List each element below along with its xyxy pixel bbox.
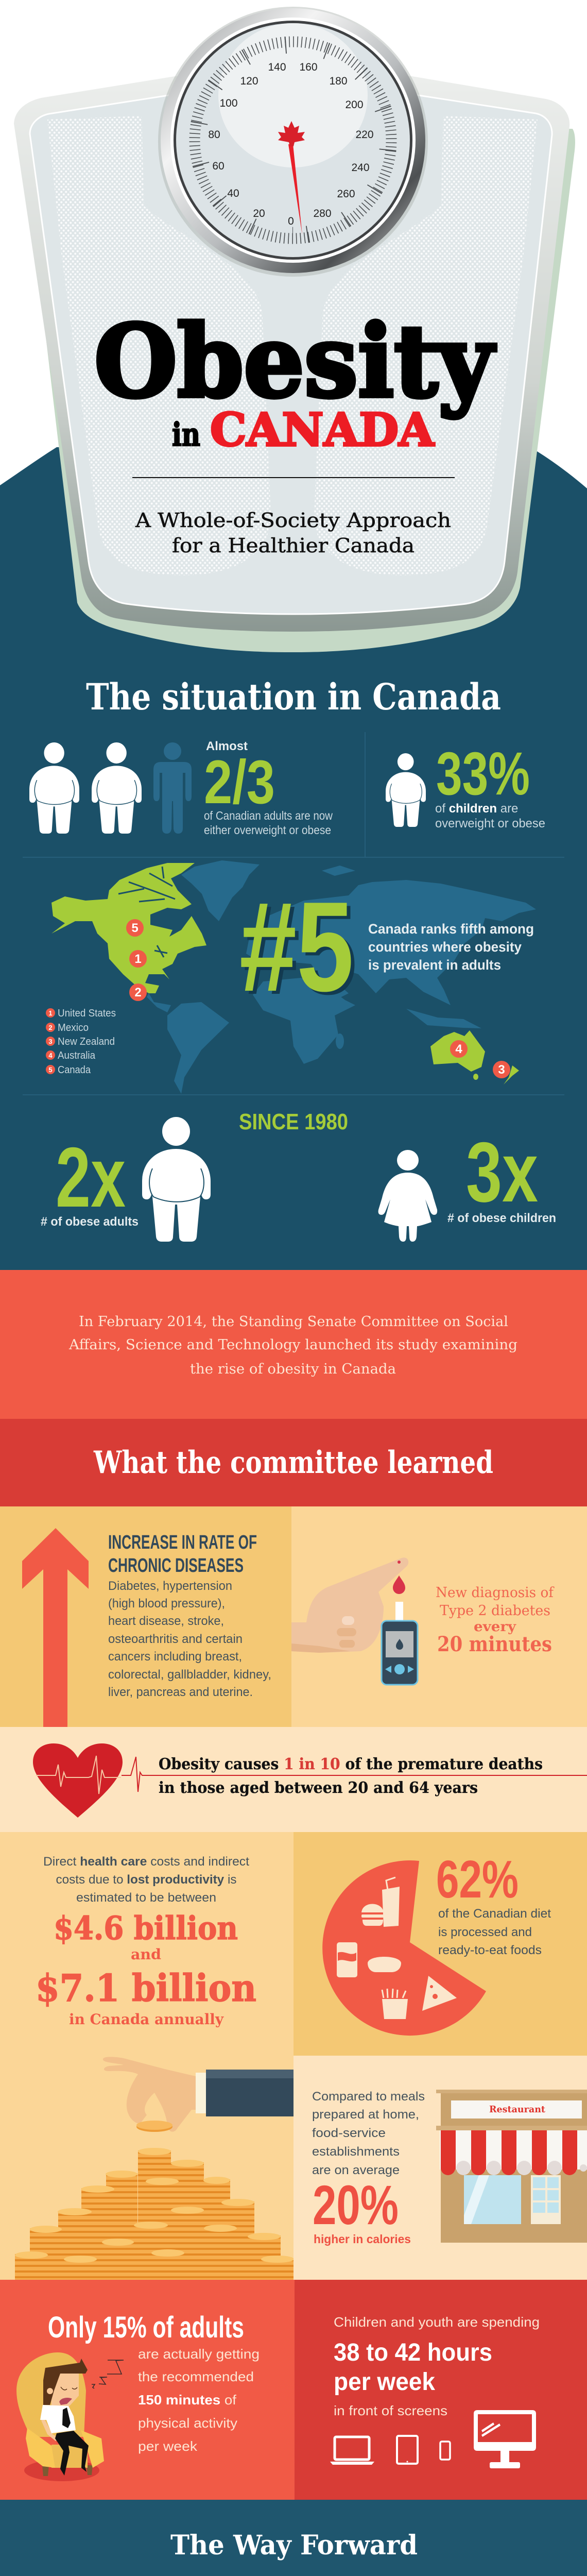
stat: 2x obese adults: 2x	[56, 1130, 126, 1225]
panel: committee intro: Affairs, Science and Technology launched its study examining	[68, 1337, 517, 1353]
stat: 3x obese children: 3x	[466, 1125, 538, 1219]
map legend: Australia	[58, 1050, 96, 1061]
panel: economic cost: $7.1 billion	[36, 1966, 256, 2010]
chart: 62 percent pie	[322, 1860, 486, 2036]
map legend: 1	[48, 1009, 53, 1017]
map legend	[46, 1008, 116, 1076]
illustration: hand dropping coin	[103, 2057, 294, 2132]
stat: 33% of children: 33%	[436, 740, 530, 808]
text: Canada ranks fifth	[368, 921, 534, 973]
dial: 160	[299, 61, 318, 73]
map legend: 2	[48, 1024, 53, 1031]
stat: 2/3 of adults	[204, 739, 333, 837]
dial: 60	[212, 160, 225, 172]
stat: 2/3 of adults: 2/3	[204, 748, 275, 817]
stat: 33% of children: of children are	[435, 802, 518, 816]
map markers: 3	[498, 1063, 505, 1077]
panel: restaurant calories: food-service	[312, 2126, 386, 2140]
panel: screen time: in front of screens	[334, 2403, 447, 2418]
map markers: 1	[134, 952, 142, 966]
dial: 0	[288, 215, 294, 227]
subtitle: A Whole-of-Society Approach	[135, 509, 451, 532]
panel: economic cost: and	[131, 1946, 161, 1963]
text: Canada ranks fifth: Canada ranks fifth among	[368, 921, 534, 937]
text: Canada ranks fifth: countries where obesity	[368, 939, 522, 955]
stat: 3x obese children: # of obese children	[447, 1211, 556, 1225]
panel: chronic diseases: osteoarthritis and certain	[108, 1632, 243, 1646]
panel: type 2 diabetes: every	[474, 1619, 516, 1635]
panel: physical activity: Only 15% of adults	[48, 2311, 244, 2344]
map legend: Canada	[58, 1064, 91, 1076]
dial	[158, 7, 428, 277]
panel: restaurant calories: higher in calories	[314, 2232, 411, 2246]
panel: physical activity: 150 minutes of	[138, 2392, 237, 2408]
panel: economic cost	[0, 1832, 294, 2280]
dial: 220	[355, 129, 374, 141]
panel: physical activity: the recommended	[138, 2369, 254, 2384]
illustration: coin stacks	[15, 2148, 294, 2280]
dial: 140	[268, 61, 286, 73]
panel: chronic diseases: (high blood pressure),	[108, 1597, 225, 1611]
panel: chronic diseases: liver, pancreas and uterine.	[108, 1685, 253, 1699]
title: Obesity	[94, 303, 496, 420]
map legend: 4	[48, 1052, 53, 1059]
background: situation panel	[0, 447, 587, 1270]
illustration: man asleep in armchair	[16, 2352, 124, 2481]
background: header white	[0, 0, 587, 644]
panel: premature deaths: Obesity causes 1 in 10 of the premature deaths	[159, 1755, 543, 1773]
dial: 260	[337, 188, 355, 200]
panel: economic cost: costs due to lost productivity is	[56, 1873, 236, 1887]
dial: 80	[208, 129, 220, 141]
panel: economic cost: in Canada annually	[69, 2011, 224, 2028]
panel: chronic diseases: heart disease, stroke,	[108, 1614, 224, 1628]
panel: restaurant calories: 20%	[313, 2174, 399, 2236]
panel: restaurant calories: establishments	[312, 2145, 400, 2159]
panel: screen time: Children and youth are spending	[334, 2314, 540, 2330]
panel: type 2 diabetes	[291, 1506, 587, 1727]
icon: girl	[378, 1150, 437, 1242]
stat: 33% of children	[435, 740, 545, 831]
panel: premature deaths	[0, 1727, 587, 1832]
heading: the situation in Canada: The situation in Canada	[86, 675, 501, 718]
panel: committee intro: In February 2014, the Standing Senate Committee on Social	[79, 1314, 508, 1330]
dial: 120	[240, 75, 258, 87]
icon: phone	[440, 2442, 450, 2460]
panel: economic cost: Direct health care costs and indirect	[43, 1855, 249, 1869]
panel: chronic diseases: colorectal, gallbladder, kidney,	[108, 1668, 271, 1682]
map markers	[126, 919, 510, 1078]
title: in	[172, 416, 200, 453]
panel: type 2 diabetes: New diagnosis of	[436, 1585, 555, 1601]
panel: economic cost: estimated to be between	[76, 1891, 216, 1905]
panel: chronic diseases	[0, 1506, 291, 1727]
heading: the way forward	[0, 2500, 587, 2576]
panel: chronic diseases: cancers including breast,	[108, 1650, 242, 1664]
panel: processed foods	[294, 1832, 587, 2056]
map legend: United States	[58, 1008, 116, 1019]
map markers: 2	[134, 986, 142, 999]
stat: 2x obese adults: # of obese adults	[41, 1215, 139, 1229]
dial: 100	[219, 97, 238, 109]
panel: physical activity	[0, 2280, 295, 2500]
stat: 2/3 of adults: Almost	[206, 739, 248, 753]
world map	[51, 860, 536, 1094]
map markers: 5	[131, 921, 139, 935]
text: Canada ranks fifth: is prevalent in adults	[368, 957, 501, 973]
map markers: 4	[455, 1042, 462, 1056]
stat: 2/3 of adults: of Canadian adults are now	[204, 809, 333, 822]
panel: restaurant calories: Compared to meals	[312, 2090, 425, 2104]
dial: 40	[227, 188, 239, 199]
panel: processed foods: 62%	[436, 1850, 519, 1909]
panel: chronic diseases: CHRONIC DISEASES	[108, 1555, 244, 1577]
dividers	[23, 732, 564, 1095]
dial: 180	[329, 75, 348, 87]
panel: committee intro	[0, 1270, 587, 1419]
heading: the way forward: The Way Forward	[170, 2530, 418, 2561]
subtitle: for a Healthier Canada	[172, 534, 415, 557]
icon: adults, two of three overweight	[29, 742, 192, 834]
panel: physical activity: physical activity	[138, 2415, 237, 2431]
divider rule	[132, 477, 455, 478]
map legend: Mexico	[58, 1022, 89, 1033]
panel: screen time: 38 to 42 hours	[334, 2339, 492, 2366]
stat: 33% of children: overweight or obese	[435, 817, 545, 831]
map legend: New Zealand	[58, 1036, 115, 1047]
bathroom scale	[14, 76, 575, 652]
panel: committee intro: the rise of obesity in Canada	[190, 1361, 396, 1377]
dial: 200	[345, 99, 364, 111]
panel: restaurant calories	[294, 2056, 587, 2280]
panel: physical activity: per week	[138, 2438, 198, 2454]
dial: 280	[313, 208, 332, 219]
stat: 2/3 of adults: either overweight or obese	[204, 823, 331, 837]
panel: chronic diseases: INCREASE IN RATE OF	[108, 1532, 257, 1553]
panel: processed foods: of the Canadian diet	[438, 1907, 551, 1921]
stat: #5: #5	[239, 875, 354, 1018]
heading: what the committee learned	[0, 1419, 587, 1506]
subtitle	[135, 509, 451, 557]
icon: laptop	[330, 2437, 374, 2465]
title: CANADA	[210, 403, 435, 456]
icon: large adult	[142, 1117, 211, 1242]
panel: restaurant calories: prepared at home,	[312, 2108, 419, 2122]
panel: chronic diseases: Diabetes, hypertension	[108, 1579, 232, 1593]
heading: since 1980: SINCE 1980	[239, 1109, 348, 1134]
heading: what the committee learned: What the committee learned	[93, 1445, 493, 1481]
panel: economic cost: $4.6 billion	[54, 1909, 238, 1947]
panel: processed foods: ready-to-eat foods	[438, 1943, 542, 1957]
map legend: 3	[48, 1038, 53, 1045]
panel: screen time: per week	[334, 2368, 435, 2396]
dial: 240	[351, 162, 370, 174]
panel: processed foods: is processed and	[438, 1925, 532, 1939]
illustration: restaurant	[436, 2090, 587, 2243]
panel: screen time	[295, 2280, 587, 2500]
panel: type 2 diabetes: Type 2 diabetes	[440, 1603, 550, 1619]
map legend: 5	[48, 1066, 53, 1074]
stat: #5: #5	[243, 878, 357, 1021]
illustration: restaurant: Restaurant	[489, 2104, 546, 2115]
icon: child overweight	[386, 753, 426, 827]
dial: 20	[253, 208, 265, 219]
panel: premature deaths: in those aged between 20 and 64 years	[159, 1779, 478, 1797]
panel: restaurant calories: are on average	[312, 2163, 400, 2177]
icon: desktop monitor	[474, 2410, 536, 2468]
panel: type 2 diabetes: 20 minutes	[437, 1632, 552, 1656]
icon: tablet	[397, 2436, 418, 2464]
panel: physical activity: are actually getting	[138, 2346, 260, 2362]
